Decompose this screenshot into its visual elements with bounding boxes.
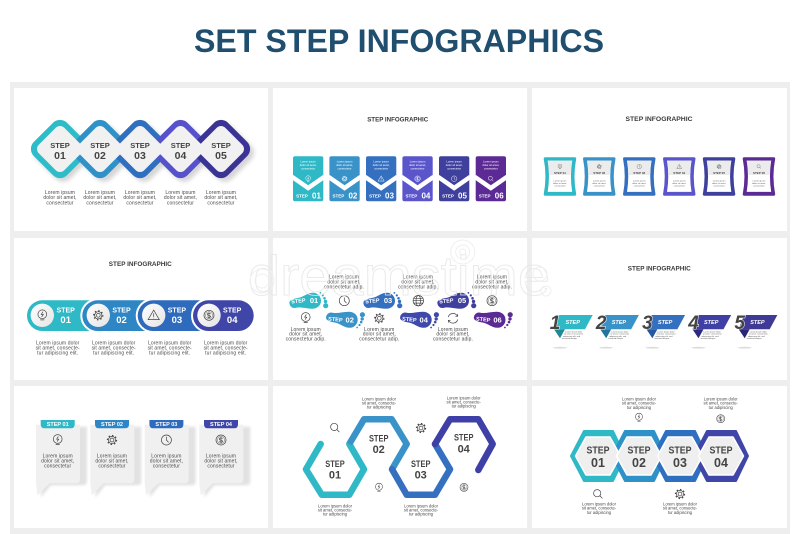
diamond faces <box>35 124 246 174</box>
card 01: STEP <box>296 194 308 199</box>
footprint captions: consectetur adip. <box>472 284 512 290</box>
banner 5: STEP <box>750 320 765 326</box>
footprint captions: dolor sit amet, <box>327 279 361 285</box>
diamond captions: consectetur <box>167 200 194 206</box>
banner 5: sit amet, consectetur <box>749 333 768 336</box>
hourglass card 01 <box>544 157 576 196</box>
hexagon labels: STEP <box>325 459 345 469</box>
hexagon labels: STEP <box>369 433 388 443</box>
banner 4: 4 <box>687 313 699 334</box>
card 02: dolor sit amet, <box>336 163 353 167</box>
bubble 04: consectetur <box>207 464 235 470</box>
heading: STEP INFOGRAPHIC <box>367 117 429 124</box>
hexagon labels: STEP <box>411 459 430 469</box>
capsule 01: 01 <box>60 315 72 326</box>
banner 2: STEP <box>612 320 626 326</box>
banner 3: 3 <box>642 313 653 334</box>
hourglass card 02 <box>583 157 616 196</box>
card 02: STEP <box>333 194 344 199</box>
banner 1: 1 <box>550 313 560 334</box>
footprint captions: consectetur adip. <box>359 337 399 343</box>
card 05: Lorem ipsum <box>446 159 463 163</box>
hexagon face labels: 02 <box>632 456 646 470</box>
hourglass card 06: consectetur <box>753 184 765 187</box>
capsule captions: sit amet, consecte- <box>36 345 80 351</box>
card 01: dolor sit amet, <box>300 163 317 167</box>
card 03: 03 <box>385 191 394 200</box>
linked hexagon captions: tur adipiscing <box>627 405 652 410</box>
banner 3: eiusmod tempor <box>654 337 670 340</box>
card 04: STEP <box>406 194 417 199</box>
bubble 04: STEP 04 <box>210 422 233 428</box>
hourglass card 05: dolor sit amet, <box>712 182 726 185</box>
capsule captions: Lorem ipsum dolor <box>148 340 192 346</box>
banner 1: STEP <box>566 320 580 326</box>
diamond labels: STEP <box>90 141 110 150</box>
footprint 04: STEP <box>402 316 417 324</box>
diamond captions: Lorem ipsum <box>45 190 75 196</box>
hourglass card 01: Lorem ipsum <box>554 179 566 182</box>
footprint captions: dolor sit amet, <box>436 332 470 338</box>
hexagon captions: tur adipiscing <box>409 512 434 516</box>
hourglass card 05 <box>703 157 735 196</box>
hourglass card 06: STEP 06 <box>753 171 765 175</box>
card 06: STEP <box>479 194 491 199</box>
hexagon face labels: STEP <box>628 444 650 456</box>
diamond captions: Lorem ipsum <box>165 190 196 196</box>
footprint 01: 01 <box>310 296 318 305</box>
card 03: Lorem ipsum <box>373 159 390 163</box>
hexagon face labels: STEP <box>710 444 732 456</box>
card 03 <box>365 156 397 201</box>
banner 4 <box>687 313 731 349</box>
banner 2: Lorem ipsum dolor <box>611 330 629 334</box>
diamond captions: consectetur <box>126 200 154 206</box>
linked hexagon captions: sit amet, consecte- <box>582 506 617 511</box>
footprint captions: Lorem ipsum <box>403 274 433 280</box>
card 06: 06 <box>495 191 504 200</box>
hexagon faces <box>576 437 744 475</box>
card 05: consectetur <box>447 166 461 170</box>
banner 1: Lorem ipsum dolor <box>565 330 583 334</box>
footprint 05: STEP <box>439 298 454 305</box>
hexagon captions: Lorem ipsum dolor <box>447 396 481 400</box>
footprint captions: consectetur adip. <box>433 337 473 343</box>
diamond captions: dolor sit amet, <box>123 195 157 201</box>
diamond captions: dolor sit amet, <box>43 195 77 201</box>
bubble 04 <box>199 420 250 497</box>
hexagon face labels: 03 <box>673 456 687 470</box>
banner 3: Lorem ipsum dolor <box>657 330 675 334</box>
capsule 02 <box>82 300 152 331</box>
bubble 03 <box>145 420 196 497</box>
footprint 03: STEP <box>365 298 380 305</box>
footprint captions: Lorem ipsum <box>329 274 359 280</box>
diamond captions: Lorem ipsum <box>125 190 155 196</box>
bubble 02 <box>90 420 141 497</box>
diamond captions: dolor sit amet, <box>164 195 197 201</box>
card 04: 04 <box>421 191 431 200</box>
capsule captions: sit amet, consecte- <box>204 345 248 351</box>
diamond captions: consectetur <box>207 200 235 206</box>
capsule 04 <box>193 300 254 331</box>
card 05: STEP <box>442 194 454 199</box>
card 03: STEP <box>369 194 381 199</box>
footprint 03: 03 <box>384 296 392 305</box>
hourglass card 05: STEP 05 <box>713 171 725 175</box>
hexagon captions: sit amet, consecte- <box>447 400 482 404</box>
card 06: Lorem ipsum <box>483 159 499 163</box>
bubble 04: Lorem ipsum <box>206 454 236 460</box>
banner 5: 5 <box>734 313 745 334</box>
linked hexagon icons <box>594 413 725 498</box>
hourglass card 02: dolor sit amet, <box>592 182 607 185</box>
card 02: consectetur <box>338 166 352 170</box>
diamond labels: STEP <box>211 141 231 150</box>
hexagon icons <box>331 423 468 491</box>
banner 2: sit amet, consectetur <box>610 333 630 336</box>
hourglass card 03 <box>623 157 656 196</box>
capsule captions: tur adipiscing elit. <box>37 350 78 356</box>
hourglass card 03: STEP 03 <box>633 171 646 175</box>
diamond labels <box>50 141 231 162</box>
capsule captions: tur adipiscing elit. <box>149 350 190 356</box>
panel: rounded diamonds five steps <box>14 88 268 231</box>
linked hexagon captions: Lorem ipsum dolor <box>663 502 698 506</box>
card 03: dolor sit amet, <box>373 163 390 167</box>
heading: STEP INFOGRAPHIC <box>628 265 691 272</box>
hexagon face labels <box>586 444 732 470</box>
card 04: Lorem ipsum <box>410 159 426 163</box>
diamond captions: Lorem ipsum <box>206 190 236 196</box>
capsule captions: sit amet, consecte- <box>92 345 136 351</box>
banner 2: adipiscing elit, sed <box>609 335 627 338</box>
banner 5: Lorem ipsum dolor <box>750 330 767 334</box>
bubble 03: consectetur <box>153 464 180 470</box>
hourglass card 05: consectetur <box>713 184 725 187</box>
linked hexagon captions: sit amet, consecte- <box>704 401 739 406</box>
capsule 03: STEP <box>168 307 186 314</box>
diamond shadows <box>30 119 258 186</box>
card 06 <box>475 156 507 201</box>
hexagon captions <box>318 396 482 516</box>
capsule 03: 03 <box>172 315 182 326</box>
footprint 01: STEP <box>291 298 306 305</box>
hourglass card 03: dolor sit amet, <box>632 182 647 185</box>
footprint captions: consectetur adip. <box>324 284 364 290</box>
footprint 04: 04 <box>420 316 429 325</box>
hourglass card 01: consectetur <box>554 184 566 187</box>
banner 2: 2 <box>595 313 607 334</box>
footprint captions: Lorem ipsum <box>364 327 394 333</box>
footprint captions: consectetur adip. <box>286 337 326 343</box>
hexagon captions: tur adipiscing <box>452 404 476 408</box>
hourglass card 05: Lorem ipsum <box>713 179 726 182</box>
hexagon labels: 03 <box>415 470 427 482</box>
diamond labels: 01 <box>54 150 66 162</box>
footprint 05 <box>437 292 476 309</box>
footprint 02 <box>326 312 365 328</box>
hexagon face labels: STEP <box>586 444 610 456</box>
footprint captions: dolor sit amet, <box>401 279 435 285</box>
linked hexagon captions <box>582 396 739 515</box>
bubble 01: STEP 01 <box>47 422 69 428</box>
linked hexagon captions: Lorem ipsum dolor <box>622 396 657 402</box>
diamond captions <box>43 190 238 206</box>
card 01: Lorem ipsum <box>300 159 317 163</box>
diamond captions: dolor sit amet, <box>83 195 117 201</box>
bubble 03: dolor sit amet, <box>150 459 183 465</box>
banner 3: sit amet, consectetur <box>656 333 676 336</box>
panel: speech bubble cards <box>14 386 268 528</box>
bubble 04: dolor sit amet, <box>204 459 238 465</box>
banner 3 <box>642 313 685 349</box>
capsule 04: 04 <box>227 315 238 326</box>
footprint captions: dolor sit amet, <box>363 332 396 338</box>
banner 1: adipiscing elit, sed <box>563 335 581 338</box>
card 02 <box>328 156 361 201</box>
diamond labels: STEP <box>130 141 150 150</box>
bubble 01: consectetur <box>44 464 71 470</box>
panel: capsule steps <box>14 238 268 380</box>
hourglass card 04: dolor sit amet, <box>672 182 687 185</box>
bubble 01: Lorem ipsum <box>43 454 73 460</box>
hourglass card 02: Lorem ipsum <box>593 179 606 182</box>
card 06: dolor sit amet, <box>482 163 500 167</box>
footprint 02: STEP <box>328 316 343 324</box>
linked hexagon captions: tur adipiscing <box>668 510 693 515</box>
hourglass card 01: dolor sit amet, <box>553 182 567 185</box>
footprint captions: dolor sit amet, <box>289 332 322 338</box>
capsule captions: sit amet, consecte- <box>148 345 192 351</box>
hourglass card 06: Lorem ipsum <box>753 179 765 182</box>
diamond captions: consectetur <box>46 200 74 206</box>
footprint icons <box>301 296 497 323</box>
linked hexagon captions: tur adipiscing <box>709 405 733 410</box>
hexagon captions: sit amet, consecte- <box>318 508 353 512</box>
banner 4: Lorem ipsum dolor <box>704 330 721 334</box>
capsule captions: Lorem ipsum dolor <box>92 340 136 346</box>
footprint 03 <box>363 292 402 309</box>
banner 4: STEP <box>704 320 719 326</box>
banner 4: adipiscing elit, sed <box>702 335 719 338</box>
card 04: dolor sit amet, <box>409 163 426 167</box>
hexagon labels: 04 <box>458 444 471 456</box>
card 04 <box>401 156 434 201</box>
watermark: dreamstime <box>248 244 550 307</box>
heading: STEP INFOGRAPHIC <box>626 116 693 123</box>
capsule 01: STEP <box>57 307 75 314</box>
linked hexagon captions: tur adipiscing <box>587 510 612 515</box>
capsule captions: tur adipiscing elit. <box>93 350 134 356</box>
diamond labels: STEP <box>171 141 190 150</box>
panel: hourglass cards six steps <box>532 88 787 231</box>
banner 3: adipiscing elit, sed <box>655 335 673 338</box>
bubble 02: consectetur <box>98 464 126 470</box>
banner 5: eiusmod tempor <box>747 337 762 340</box>
hourglass card 04: Lorem ipsum <box>673 179 686 182</box>
bubble 02: STEP 02 <box>101 422 123 428</box>
banner 3: STEP <box>658 320 673 326</box>
hourglass card 04: STEP 04 <box>673 171 686 175</box>
hourglass card 06 <box>743 157 775 196</box>
diamond labels: 02 <box>94 150 106 162</box>
capsule 02: 02 <box>116 315 127 326</box>
card 01: consectetur <box>301 166 315 170</box>
capsule captions: tur adipiscing elit. <box>205 350 246 356</box>
footprint captions: Lorem ipsum <box>291 327 321 333</box>
footprint 06 <box>474 312 513 328</box>
footprint captions <box>286 274 512 343</box>
hexagon face labels: STEP <box>668 444 692 456</box>
panel: chevron cards six steps <box>273 88 527 231</box>
footprint 05: 05 <box>458 296 466 305</box>
card 05: 05 <box>458 191 467 200</box>
footprint 06: STEP <box>476 316 491 324</box>
hexagon captions: sit amet, consecte- <box>404 508 439 512</box>
footprint 02: 02 <box>346 316 354 325</box>
main title: SET STEP INFOGRAPHICS <box>194 23 604 59</box>
hexagon captions: Lorem ipsum dolor <box>318 504 353 508</box>
hourglass card 06: dolor sit amet, <box>752 182 766 185</box>
footprint captions: Lorem ipsum <box>438 327 468 333</box>
capsule 02: STEP <box>112 307 131 314</box>
diamond labels: 04 <box>175 150 186 162</box>
hexagon labels <box>325 433 473 482</box>
linked hexagon captions: sit amet, consecte- <box>622 401 657 406</box>
hexagon labels: 02 <box>373 444 385 456</box>
capsule 03 <box>138 300 208 331</box>
bubble 03: Lorem ipsum <box>151 454 182 460</box>
banner 5: adipiscing elit, sed <box>748 335 766 338</box>
bubble 01: dolor sit amet, <box>41 459 74 465</box>
bubble 03: STEP 03 <box>155 422 177 428</box>
panel: hexagon snake <box>273 386 527 528</box>
card 02: 02 <box>348 191 358 200</box>
linked hexagon captions: Lorem ipsum dolor <box>582 502 617 506</box>
hourglass card 03: consectetur <box>634 184 645 187</box>
hourglass card 03: Lorem ipsum <box>633 179 646 182</box>
bubble 01 <box>36 420 87 497</box>
card 04: consectetur <box>411 166 425 170</box>
diamond rings <box>27 116 254 182</box>
hexagon rings <box>571 431 748 481</box>
hexagon captions: Lorem ipsum dolor <box>404 504 439 508</box>
diamond labels: 05 <box>215 150 227 162</box>
heading: STEP INFOGRAPHIC <box>109 261 172 268</box>
capsule 01 <box>27 300 97 331</box>
hourglass card 02: consectetur <box>594 184 605 187</box>
bubble 02: Lorem ipsum <box>97 454 127 460</box>
diamond captions: Lorem ipsum <box>85 190 115 196</box>
hourglass card 04 <box>663 157 696 196</box>
linked hexagon captions: Lorem ipsum dolor <box>704 396 738 402</box>
panel: numbered banners five steps <box>532 238 787 380</box>
linked hexagon captions: sit amet, consecte- <box>663 506 698 511</box>
card 02: Lorem ipsum <box>337 159 353 163</box>
capsule captions <box>36 340 248 356</box>
banner 2 <box>595 313 639 349</box>
banner 1 <box>550 313 593 349</box>
diamond captions: dolor sit amet, <box>204 195 238 201</box>
hourglass card 01: STEP 01 <box>554 171 566 175</box>
hexagon snake path <box>306 419 493 495</box>
hexagon captions: tur adipiscing <box>367 404 392 410</box>
hourglass card 04: consectetur <box>674 184 685 187</box>
capsule captions: Lorem ipsum dolor <box>36 340 80 346</box>
card 06: consectetur <box>484 166 498 170</box>
card 03: consectetur <box>374 166 388 170</box>
footprint captions: consectetur adip. <box>398 284 438 290</box>
panel: linked hexagons <box>532 386 787 528</box>
banner 1: eiusmod tempor <box>562 337 577 340</box>
diamond captions: consectetur <box>86 200 114 206</box>
footprint captions: dolor sit amet, <box>475 279 509 285</box>
banner 4: sit amet, consectetur <box>702 333 722 336</box>
footprint 04 <box>400 312 439 328</box>
footprint 01 <box>289 292 328 309</box>
banner 1: sit amet, consectetur <box>564 333 583 336</box>
hexagon captions: sit amet, consecte- <box>362 400 397 406</box>
footprint captions: Lorem ipsum <box>477 274 507 280</box>
hexagon captions: Lorem ipsum dolor <box>362 396 397 402</box>
card 05: dolor sit amet, <box>446 163 463 167</box>
diamond labels: 03 <box>134 150 146 162</box>
banner 4: eiusmod tempor <box>700 337 716 340</box>
capsule captions: Lorem ipsum dolor <box>204 340 248 346</box>
hourglass card 02: STEP 02 <box>593 171 606 175</box>
hexagon captions: tur adipiscing <box>323 512 348 516</box>
card 01: 01 <box>312 191 321 200</box>
footprint 06: 06 <box>493 316 502 325</box>
banner 5 <box>734 313 777 349</box>
card 05 <box>438 156 470 201</box>
card 01 <box>292 156 324 201</box>
banner 2: eiusmod tempor <box>608 337 623 340</box>
hexagon face labels: 01 <box>591 456 605 470</box>
capsule 04: STEP <box>223 307 242 314</box>
panel: footprints six steps <box>273 238 527 380</box>
hexagon labels: 01 <box>329 470 341 482</box>
bubble 02: dolor sit amet, <box>95 459 129 465</box>
diamond labels: STEP <box>50 141 70 150</box>
hexagon face labels: 04 <box>714 456 728 470</box>
hexagon labels: STEP <box>454 433 473 443</box>
